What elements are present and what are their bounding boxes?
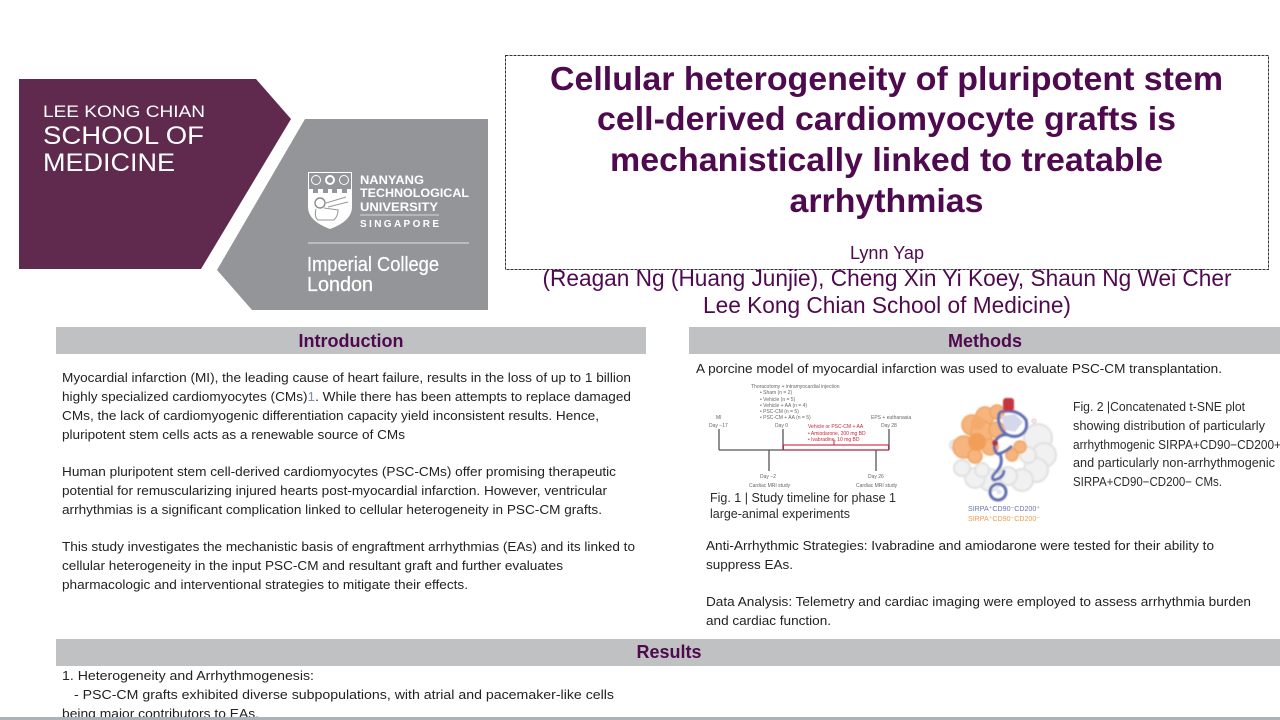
logo: Lee Kong Chian School of Medicine: MEDICINE xyxy=(43,149,175,177)
text: data analysis xyxy=(706,594,1251,628)
legend: t-SNE populations xyxy=(968,504,1040,523)
logo: Lee Kong Chian School of Medicine: SCHOOL OF xyxy=(43,122,204,150)
chart: t-SNE plot xyxy=(950,398,1056,500)
authors: Lynn Yap xyxy=(850,243,924,263)
chart: study timeline: Thoracotomy + intramyocardial injection xyxy=(751,384,840,390)
text: results finding 1 xyxy=(62,668,614,720)
text: introduction paragraph 1: highly specialized cardiomyocytes (CMs) 1. While there has been attempts to replace damaged xyxy=(62,389,631,404)
text: data analysis: Data Analysis: Telemetry and cardiac imaging were employed to assess arrhythmia burden xyxy=(706,594,1251,609)
text: introduction paragraph 1: pluripotent stem cells acts as a renewable source of CMs xyxy=(62,427,405,442)
gray clusters xyxy=(950,424,1056,491)
blue clusters xyxy=(990,411,1027,500)
panel: results xyxy=(56,639,1280,720)
chart: study timeline: • Vehicle (n = 5) xyxy=(760,397,796,403)
title: cell-derived cardiomyocyte grafts is xyxy=(597,100,1176,137)
chart: study timeline: Day 28 xyxy=(881,423,897,429)
chart: study timeline: Day 26 xyxy=(868,474,884,480)
text: introduction paragraph 2: Human pluripotent stem cell-derived cardiomyocytes (PSC-CMs) offer promising therapeutic xyxy=(62,464,616,479)
caption: figure 2: showing distribution of particularly xyxy=(1073,419,1266,433)
text: introduction paragraph 3: This study investigates the mechanistic basis of engraftment arrhythmias (EAs) and its linked to xyxy=(62,539,635,554)
logo: NTU Singapore and Imperial College London: London xyxy=(307,274,373,296)
panel: introduction xyxy=(56,327,646,592)
logo: NTU Singapore and Imperial College London: TECHNOLOGICAL xyxy=(360,186,469,200)
text: anti-arrhythmic strategies: suppress EAs. xyxy=(706,557,793,572)
chart: study timeline: • PSC-CM + AA (n = 5) xyxy=(760,415,811,421)
heading: results xyxy=(56,639,1280,666)
icon: university shield xyxy=(308,172,352,229)
panel: methods xyxy=(689,327,1280,628)
authors: (Reagan Ng (Huang Junjie), Cheng Xin Yi Koey, Shaun Ng Wei Cher xyxy=(542,265,1232,291)
legend: t-SNE populations: SIRPA⁺CD90⁻CD200⁺ xyxy=(968,504,1040,513)
logo: Lee Kong Chian School of Medicine xyxy=(19,79,291,269)
text: introduction paragraph 1: Myocardial infarction (MI), the leading cause of heart failure, results in the loss of up to 1 billion xyxy=(62,370,631,385)
chart: study timeline: MI xyxy=(716,415,722,421)
authors xyxy=(542,243,1232,318)
text: anti-arrhythmic strategies xyxy=(706,538,1214,572)
authors: Lee Kong Chian School of Medicine) xyxy=(703,292,1071,318)
caption: figure 1: Fig. 1 | Study timeline for phase 1 xyxy=(710,491,896,505)
heading: results: Results xyxy=(636,642,702,662)
text: introduction paragraph 2 xyxy=(62,464,616,517)
chart: study timeline: Day 0 xyxy=(775,423,788,429)
text: results finding 1: 1. Heterogeneity and Arrhythmogenesis: xyxy=(62,668,314,683)
caption: figure 2: and particularly non-arrhythmogenic xyxy=(1073,456,1275,470)
legend: t-SNE populations: SIRPA⁺CD90⁻CD200⁻ xyxy=(968,514,1040,523)
caption: figure 1: large-animal experiments xyxy=(710,507,850,521)
chart: study timeline: EPS + euthanasia xyxy=(871,415,911,421)
text: introduction paragraph 1: CMs, the lack of cardiomyogenic differentiation capacity yield inconsistent results. Hence, xyxy=(62,408,599,423)
logo: NTU Singapore and Imperial College London: NANYANG xyxy=(360,173,424,187)
text: introduction paragraph 3 xyxy=(62,539,635,592)
chart: study timeline: • PSC-CM (n = 5) xyxy=(760,409,799,415)
chart: study timeline xyxy=(709,384,911,489)
logo: NTU Singapore and Imperial College London: Imperial College xyxy=(307,254,439,276)
logo: Lee Kong Chian School of Medicine: LEE KONG CHIAN xyxy=(43,102,205,121)
chart: study timeline: • Amiodarone, 200 mg BD xyxy=(808,431,866,437)
chart: study timeline: Vehicle or PSC-CM + AA xyxy=(808,424,864,430)
caption: figure 2 xyxy=(1073,400,1280,489)
chart: study timeline: Day −2 xyxy=(760,474,776,480)
red clusters xyxy=(1003,398,1014,411)
caption: figure 1 xyxy=(710,491,896,521)
title xyxy=(550,60,1223,219)
chart: study timeline: • Vehicle + AA (n = 4) xyxy=(760,403,807,409)
text: introduction paragraph 2: potential for remuscularizing injured hearts post-myocardial infarction. However, ventricular xyxy=(62,483,608,498)
text: anti-arrhythmic strategies: Anti-Arrhythmic Strategies: Ivabradine and amiodarone were tested for their ability to xyxy=(706,538,1214,553)
caption: figure 2: Fig. 2 |Concatenated t-SNE plot xyxy=(1073,400,1246,414)
chart: study timeline: • Ivabradine, 10 mg BD xyxy=(808,437,860,443)
text: introduction paragraph 3: pharmacologic and interventional strategies to mitigate their effects. xyxy=(62,577,468,592)
heading: introduction: Introduction xyxy=(299,331,403,351)
text: introduction paragraph 2: arrhythmias is a significant complication linked to cellular heterogeneity in PSC-CM grafts. xyxy=(62,502,602,517)
text: results finding 1: - PSC-CM grafts exhibited diverse subpopulations, with atrial and pacemaker-like cells xyxy=(74,687,614,702)
chart: study timeline: Cardiac MRI study xyxy=(749,483,791,489)
caption: figure 2: SIRPA+CD90−CD200− CMs. xyxy=(1073,475,1222,489)
text: introduction paragraph 3: cellular heterogeneity in the input PSC-CM and resultant graft and further evaluates xyxy=(62,558,563,573)
text: introduction paragraph 1 xyxy=(62,370,631,442)
title: arrhythmias xyxy=(790,182,984,219)
heading: introduction xyxy=(56,327,646,354)
title: Cellular heterogeneity of pluripotent stem xyxy=(550,60,1223,97)
title: mechanistically linked to treatable xyxy=(610,141,1163,178)
title box xyxy=(506,56,1268,270)
text: methods intro: A porcine model of myocardial infarction was used to evaluate PSC-CM transplantation. xyxy=(696,361,1222,376)
chart: study timeline: • Sham (n = 2) xyxy=(760,390,793,396)
heading: methods xyxy=(689,327,1280,354)
logo: NTU Singapore and Imperial College London: SINGAPORE xyxy=(360,219,439,230)
chart: study timeline: Cardiac MRI study xyxy=(856,483,898,489)
logo: NTU Singapore and Imperial College London xyxy=(217,119,488,310)
chart: study timeline: Day −17 xyxy=(709,423,728,429)
heading: methods: Methods xyxy=(948,331,1022,351)
text: data analysis: and cardiac function. xyxy=(706,613,831,628)
orange clusters xyxy=(953,405,1026,463)
logo: NTU Singapore and Imperial College London: UNIVERSITY xyxy=(360,200,438,214)
